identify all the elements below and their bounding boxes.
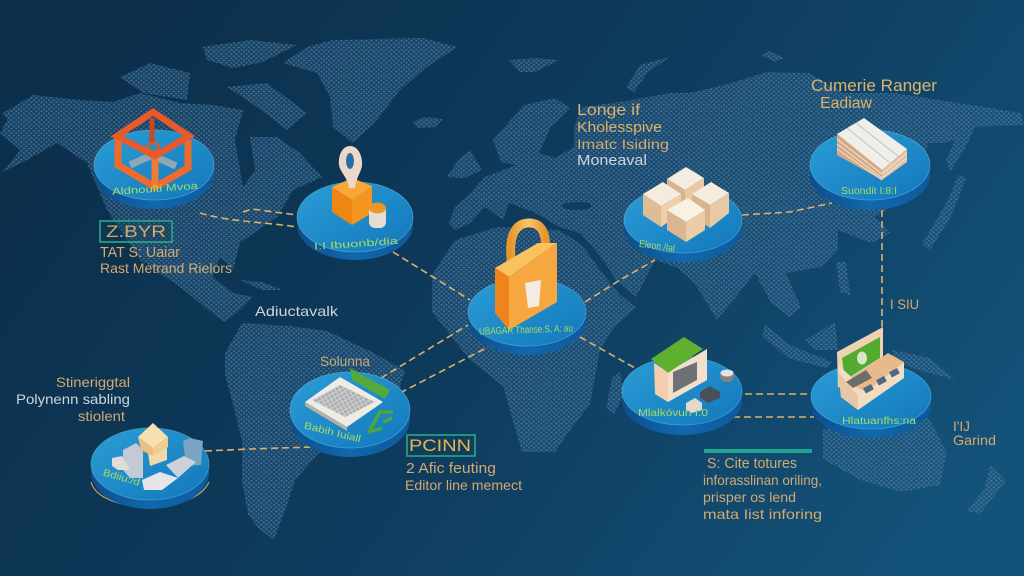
map: Europe and Asia xyxy=(449,72,1024,320)
callout: ZBYR: Rast Metrand Rielors xyxy=(100,260,232,276)
callout: PCINN: 2 Afic feuting xyxy=(406,460,496,477)
connector: node 1 to node 2 xyxy=(200,213,297,227)
map: Madagascar xyxy=(606,372,624,414)
map: Arctic island north xyxy=(203,40,297,68)
icon: screen xyxy=(837,327,883,388)
text: Solunna: Solunna xyxy=(320,353,370,369)
callout: Polynenn xyxy=(16,374,130,424)
map: Indonesia xyxy=(762,325,832,368)
icon: cabinet xyxy=(838,353,904,410)
node: microwave device xyxy=(622,337,742,435)
map: Borneo xyxy=(805,322,838,350)
map: Philippines xyxy=(836,262,850,295)
map: South America xyxy=(225,323,405,540)
disc xyxy=(622,357,742,435)
icon: cup xyxy=(369,202,386,228)
callout: site features: inforasslinan oriling, xyxy=(703,472,822,488)
map: New Zealand xyxy=(967,465,1006,514)
badge: Z.BYR xyxy=(106,222,166,241)
map: Japan xyxy=(922,175,966,250)
callout: Garind: I'IJ xyxy=(953,418,970,434)
callout: Polynenn: stiolent xyxy=(78,408,125,424)
disc xyxy=(290,372,410,457)
connector: node 8 to node 9 upper xyxy=(745,393,812,395)
disc xyxy=(297,182,413,260)
map: UK xyxy=(447,150,482,178)
callout: Cumerie Ranger xyxy=(811,77,938,112)
node: stack of sheets xyxy=(810,118,930,210)
text: ISIU: I SIU xyxy=(890,296,919,312)
icon: sheet stack xyxy=(837,118,907,180)
node: four boxes xyxy=(624,167,742,262)
callout: Garind: Garind xyxy=(953,432,996,448)
disc label: Aldnoulti Mvoa xyxy=(112,181,199,198)
callout: Polynenn: Stinerigɡtal xyxy=(56,374,130,390)
accent bar xyxy=(704,449,812,453)
callout: Cumerie Ranger: Eadiaw xyxy=(820,95,872,112)
map: Severnaya Zemlya xyxy=(761,51,784,62)
callout: Polynenn: Polynenn sabling xyxy=(16,391,130,407)
connector: node 2 to lock xyxy=(393,252,470,300)
disc xyxy=(624,187,742,262)
icon: device body xyxy=(654,349,707,402)
icon: buildings xyxy=(112,438,203,490)
map: Kamchatka xyxy=(946,127,975,172)
callout: Longe if: Imatc Isiding xyxy=(577,136,669,152)
callout: ZBYR: TAT S: Uaiar xyxy=(100,244,180,261)
connector: lock to node 8 xyxy=(580,337,635,368)
disc label: Bdiiu:/d xyxy=(102,468,141,489)
map: New Guinea xyxy=(892,350,956,380)
icon: orange wireframe cube xyxy=(117,112,189,188)
icon: green strip xyxy=(350,368,390,399)
icon: padlock body xyxy=(495,243,557,330)
connector: node 8 to node 9 lower xyxy=(733,416,814,418)
map: Africa xyxy=(432,227,636,452)
node: map pin on orange box xyxy=(297,146,413,260)
callout: Garind xyxy=(953,418,996,448)
disc xyxy=(468,278,586,355)
icon: padlock shackle xyxy=(511,223,545,266)
disc label: Babih Iuiall xyxy=(303,421,362,445)
node: wireframe cube xyxy=(94,112,214,209)
icon: keyboard panel xyxy=(305,377,383,431)
connector: node 7 to node 6 xyxy=(205,447,312,451)
map: Greenland xyxy=(283,38,457,143)
map: Iceland xyxy=(413,117,443,128)
callout: Longe if xyxy=(577,102,669,169)
connector: lock to node 6 upper xyxy=(381,325,468,378)
decorative rim line xyxy=(91,482,209,507)
icon: cream block xyxy=(138,423,168,466)
callout: site features: prisper os lend xyxy=(703,489,796,505)
badge: PCINN xyxy=(409,436,471,455)
connector: node 1 to node 2 upper xyxy=(243,209,297,215)
disc xyxy=(91,428,209,509)
callout: Longe if: Kholesspive xyxy=(577,119,662,136)
text: Adiuctavalk: Adiuctavalk xyxy=(255,303,339,319)
disc label: Mlalkóvun I:0 xyxy=(638,408,709,419)
connector: node 4 to node 9 xyxy=(881,210,883,330)
node: screen cabinet xyxy=(811,327,931,438)
connector: lock to node 3 xyxy=(585,260,655,302)
callout: site features: S: Cite totures xyxy=(707,456,797,472)
callout: site features: mata Iist inforing xyxy=(703,506,822,522)
disc label: Eleon /Ial xyxy=(638,239,676,255)
disc xyxy=(94,130,214,209)
disc xyxy=(810,130,930,210)
map: Svalbard xyxy=(509,58,559,72)
callout: Longe if: Moneaval xyxy=(577,152,647,169)
map: Cuba xyxy=(240,280,282,290)
disc label: UBAGAR Thanse.S, A: au xyxy=(479,323,573,338)
disc label: Hlatuanfhs:na xyxy=(842,416,917,427)
icon: green lid xyxy=(651,337,703,373)
disc label: I:I Ibuonb/dia xyxy=(314,236,399,253)
disc label: Suondit I:8:I xyxy=(841,186,897,197)
callout: Cumerie Ranger: Cumerie Ranger xyxy=(811,77,938,95)
dashed connectors xyxy=(200,203,882,451)
icon: green recycle mark xyxy=(368,412,393,432)
disc xyxy=(811,363,931,438)
map: Arctic island west xyxy=(120,63,190,100)
callout: site features xyxy=(703,449,822,522)
callout: ZBYR xyxy=(100,221,232,276)
map: Black Sea xyxy=(562,202,592,210)
node: keyboard panel xyxy=(290,368,410,457)
node: factory cluster xyxy=(91,423,209,509)
map: Novaya Zemlya xyxy=(626,57,670,92)
icon: front box xyxy=(667,198,705,242)
icon: left box xyxy=(643,182,681,227)
map: Australia xyxy=(823,402,947,492)
callout: PCINN xyxy=(405,435,522,493)
icon: small parts xyxy=(686,370,734,413)
map: Baffin Island xyxy=(227,83,307,130)
node: central padlock xyxy=(468,223,586,355)
icon: orange box xyxy=(332,178,372,225)
icon: back box xyxy=(667,167,704,208)
icon: pin xyxy=(339,146,362,188)
callout: Longe if: Longe if xyxy=(577,102,641,119)
connector: lock to node 6 lower xyxy=(400,347,488,393)
callout: PCINN: Editor line memect xyxy=(405,477,522,493)
map: North America xyxy=(0,93,322,322)
icon: right box xyxy=(692,182,729,228)
connector: node 3 to node 4 xyxy=(742,203,832,215)
